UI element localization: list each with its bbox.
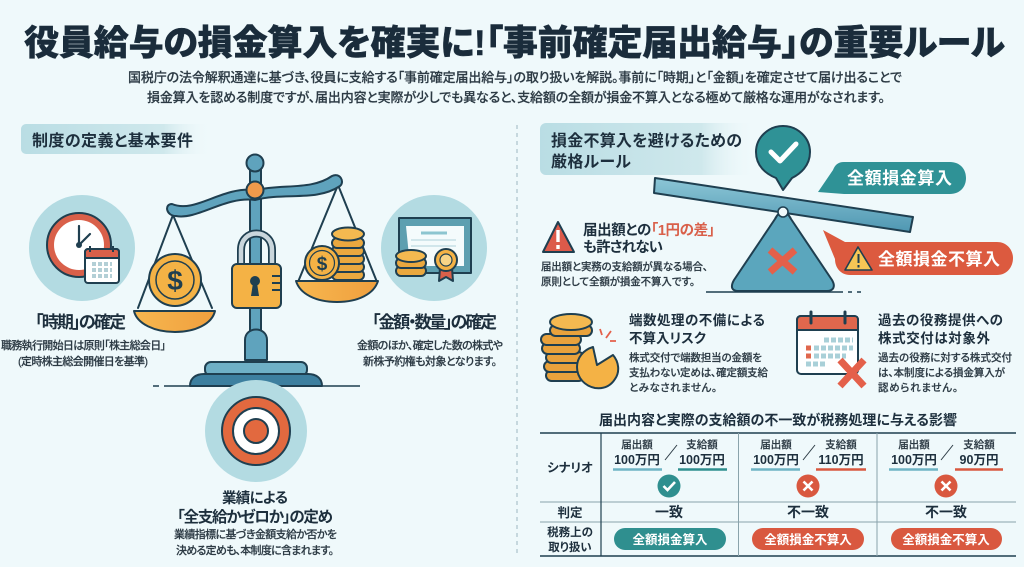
column: under payment: 全額損金不算入 [902, 532, 990, 547]
heading: fractional shares: 端数処理の不備による [629, 313, 765, 328]
heading: strict rules: 損金不算入を避けるための [551, 131, 742, 150]
table: scenarios [540, 433, 1016, 556]
panel: definition and requirements [1, 124, 503, 557]
rule: past services [797, 312, 1012, 394]
panel: performance [174, 380, 337, 557]
panel: timing [1, 195, 166, 368]
column: under payment: 100万円 [891, 453, 937, 467]
heading: fractional shares: 不算入リスク [629, 330, 706, 346]
heading: performance: 業績による [222, 489, 288, 507]
row labels [547, 461, 593, 554]
row labels: 取り扱い [548, 541, 592, 554]
heading: performance: 「全支給かゼロか」の定め [177, 507, 333, 526]
text: fractional description: 支払わない定めは、確定額支給 [629, 366, 768, 379]
text: fractional description [629, 351, 768, 394]
heading: timing: 「時期」の確定 [35, 313, 126, 332]
column: under payment [889, 438, 1003, 550]
heading: amount: 「金額・数量」の確定 [372, 312, 497, 332]
column: match [613, 438, 727, 550]
column: over payment [751, 438, 866, 550]
text: timing description: (定時株主総会開催日を基準) [18, 354, 148, 368]
icon: seesaw [654, 178, 913, 292]
callout: full deduction [818, 162, 966, 194]
row labels: 税務上の [547, 525, 593, 539]
rule: one yen difference [541, 221, 715, 288]
heading: one yen difference: 届出額との「1円の差」 [583, 221, 715, 239]
title: 役員給与の損金算入を確実に!「事前確定届出給与」の重要ルール [24, 24, 1005, 63]
text: past services description [878, 351, 1012, 394]
text: past services description: 過去の役務に対する株式交付 [878, 351, 1012, 364]
column: match: 全額損金算入 [632, 532, 708, 547]
rule: fractional shares [541, 313, 768, 394]
intro text: 損金算入を認める制度ですが、届出内容と実際が少しでも異なると、支給額の全額が損金不算入となる極めて厳格な運用がなされます。 [147, 90, 885, 105]
text: past services description: は、本制度による損金算入が [878, 366, 1006, 379]
column: over payment: 支給額 [825, 438, 857, 451]
icon: certificate and coins [381, 195, 487, 301]
intro text [128, 70, 903, 105]
heading: strict rules: 厳格ルール [551, 152, 631, 171]
column: under payment: 90万円 [960, 453, 998, 467]
text: timing description [1, 338, 166, 368]
column: over payment: 届出額 [760, 438, 792, 451]
column: match: 支給額 [686, 438, 718, 451]
heading: past services: 株式交付は対象外 [878, 330, 990, 346]
column: match: 100万円 [679, 453, 725, 467]
text: performance description: 業績指標に基づき金額支給か否かを [174, 527, 337, 541]
heading: definition [21, 124, 211, 154]
icon: warning [543, 222, 574, 252]
text: one yen description: 原則として全額が損金不算入です。 [541, 275, 695, 288]
text: amount description: 新株予約権も対象となります。 [363, 354, 497, 368]
row labels: 判定 [557, 505, 583, 520]
panel: strict rules [540, 123, 1016, 556]
text: one yen description [541, 260, 708, 288]
column: under payment: 不一致 [925, 504, 967, 520]
column: over payment: 110万円 [818, 453, 864, 467]
icon: clock and calendar [29, 195, 135, 301]
text: fractional description: 株式交付で端数担当の金額を [629, 351, 762, 364]
panel: amount [357, 195, 503, 368]
column: match: 100万円 [614, 453, 660, 467]
column: match: 届出額 [621, 438, 653, 451]
text: timing description: 職務執行開始日は原則「株主総会日」 [1, 338, 166, 352]
text: fractional description: とみなされません。 [629, 382, 717, 394]
heading: one yen difference: も許されない [583, 239, 663, 256]
text: amount description: 金額のほか、確定した数の株式や [357, 338, 503, 352]
icon: coins and pie [541, 314, 618, 388]
column: under payment: 支給額 [963, 438, 995, 451]
column: over payment: 全額損金不算入 [764, 532, 852, 547]
icon: target [205, 380, 307, 482]
column: under payment: 届出額 [898, 438, 930, 451]
heading: one yen difference [583, 221, 715, 256]
icon: balance scale: $ [167, 265, 183, 296]
heading: comparison table: 届出内容と実際の支給額の不一致が税務処理に与える影響 [599, 412, 957, 428]
icon: calendar with cross [797, 312, 864, 386]
text: one yen description: 届出額と実務の支給額が異なる場合、 [541, 260, 708, 273]
callout: full non-deduction [823, 230, 1013, 275]
text: performance description [174, 527, 337, 557]
heading: definition: 制度の定義と基本要件 [32, 131, 193, 150]
column: over payment: 不一致 [787, 504, 829, 520]
heading: past services [878, 312, 1003, 346]
icon: check pin [756, 126, 810, 190]
text: past services description: 認められません。 [878, 382, 958, 394]
column: match: 一致 [655, 504, 683, 520]
callout: full deduction: 全額損金算入 [847, 168, 952, 188]
intro text: 国税庁の法令解釈通達に基づき、役員に支給する「事前確定届出給与」の取り扱いを解説。事前に「時期」と「金額」を確定させて届け出ることで [128, 70, 903, 85]
column: over payment: 100万円 [753, 453, 799, 467]
heading: performance [177, 489, 333, 526]
heading: fractional shares [629, 313, 765, 346]
text: amount description [357, 338, 503, 368]
row labels: シナリオ [547, 461, 593, 475]
icon: balance scale: $ [317, 254, 328, 275]
icon: balance scale [134, 154, 378, 386]
heading: past services: 過去の役務提供への [878, 312, 1003, 328]
text: performance description: 決める定めも、本制度に含まれます。 [176, 543, 334, 557]
callout: full non-deduction: 全額損金不算入 [878, 249, 1000, 269]
heading: strict rules [540, 123, 755, 175]
